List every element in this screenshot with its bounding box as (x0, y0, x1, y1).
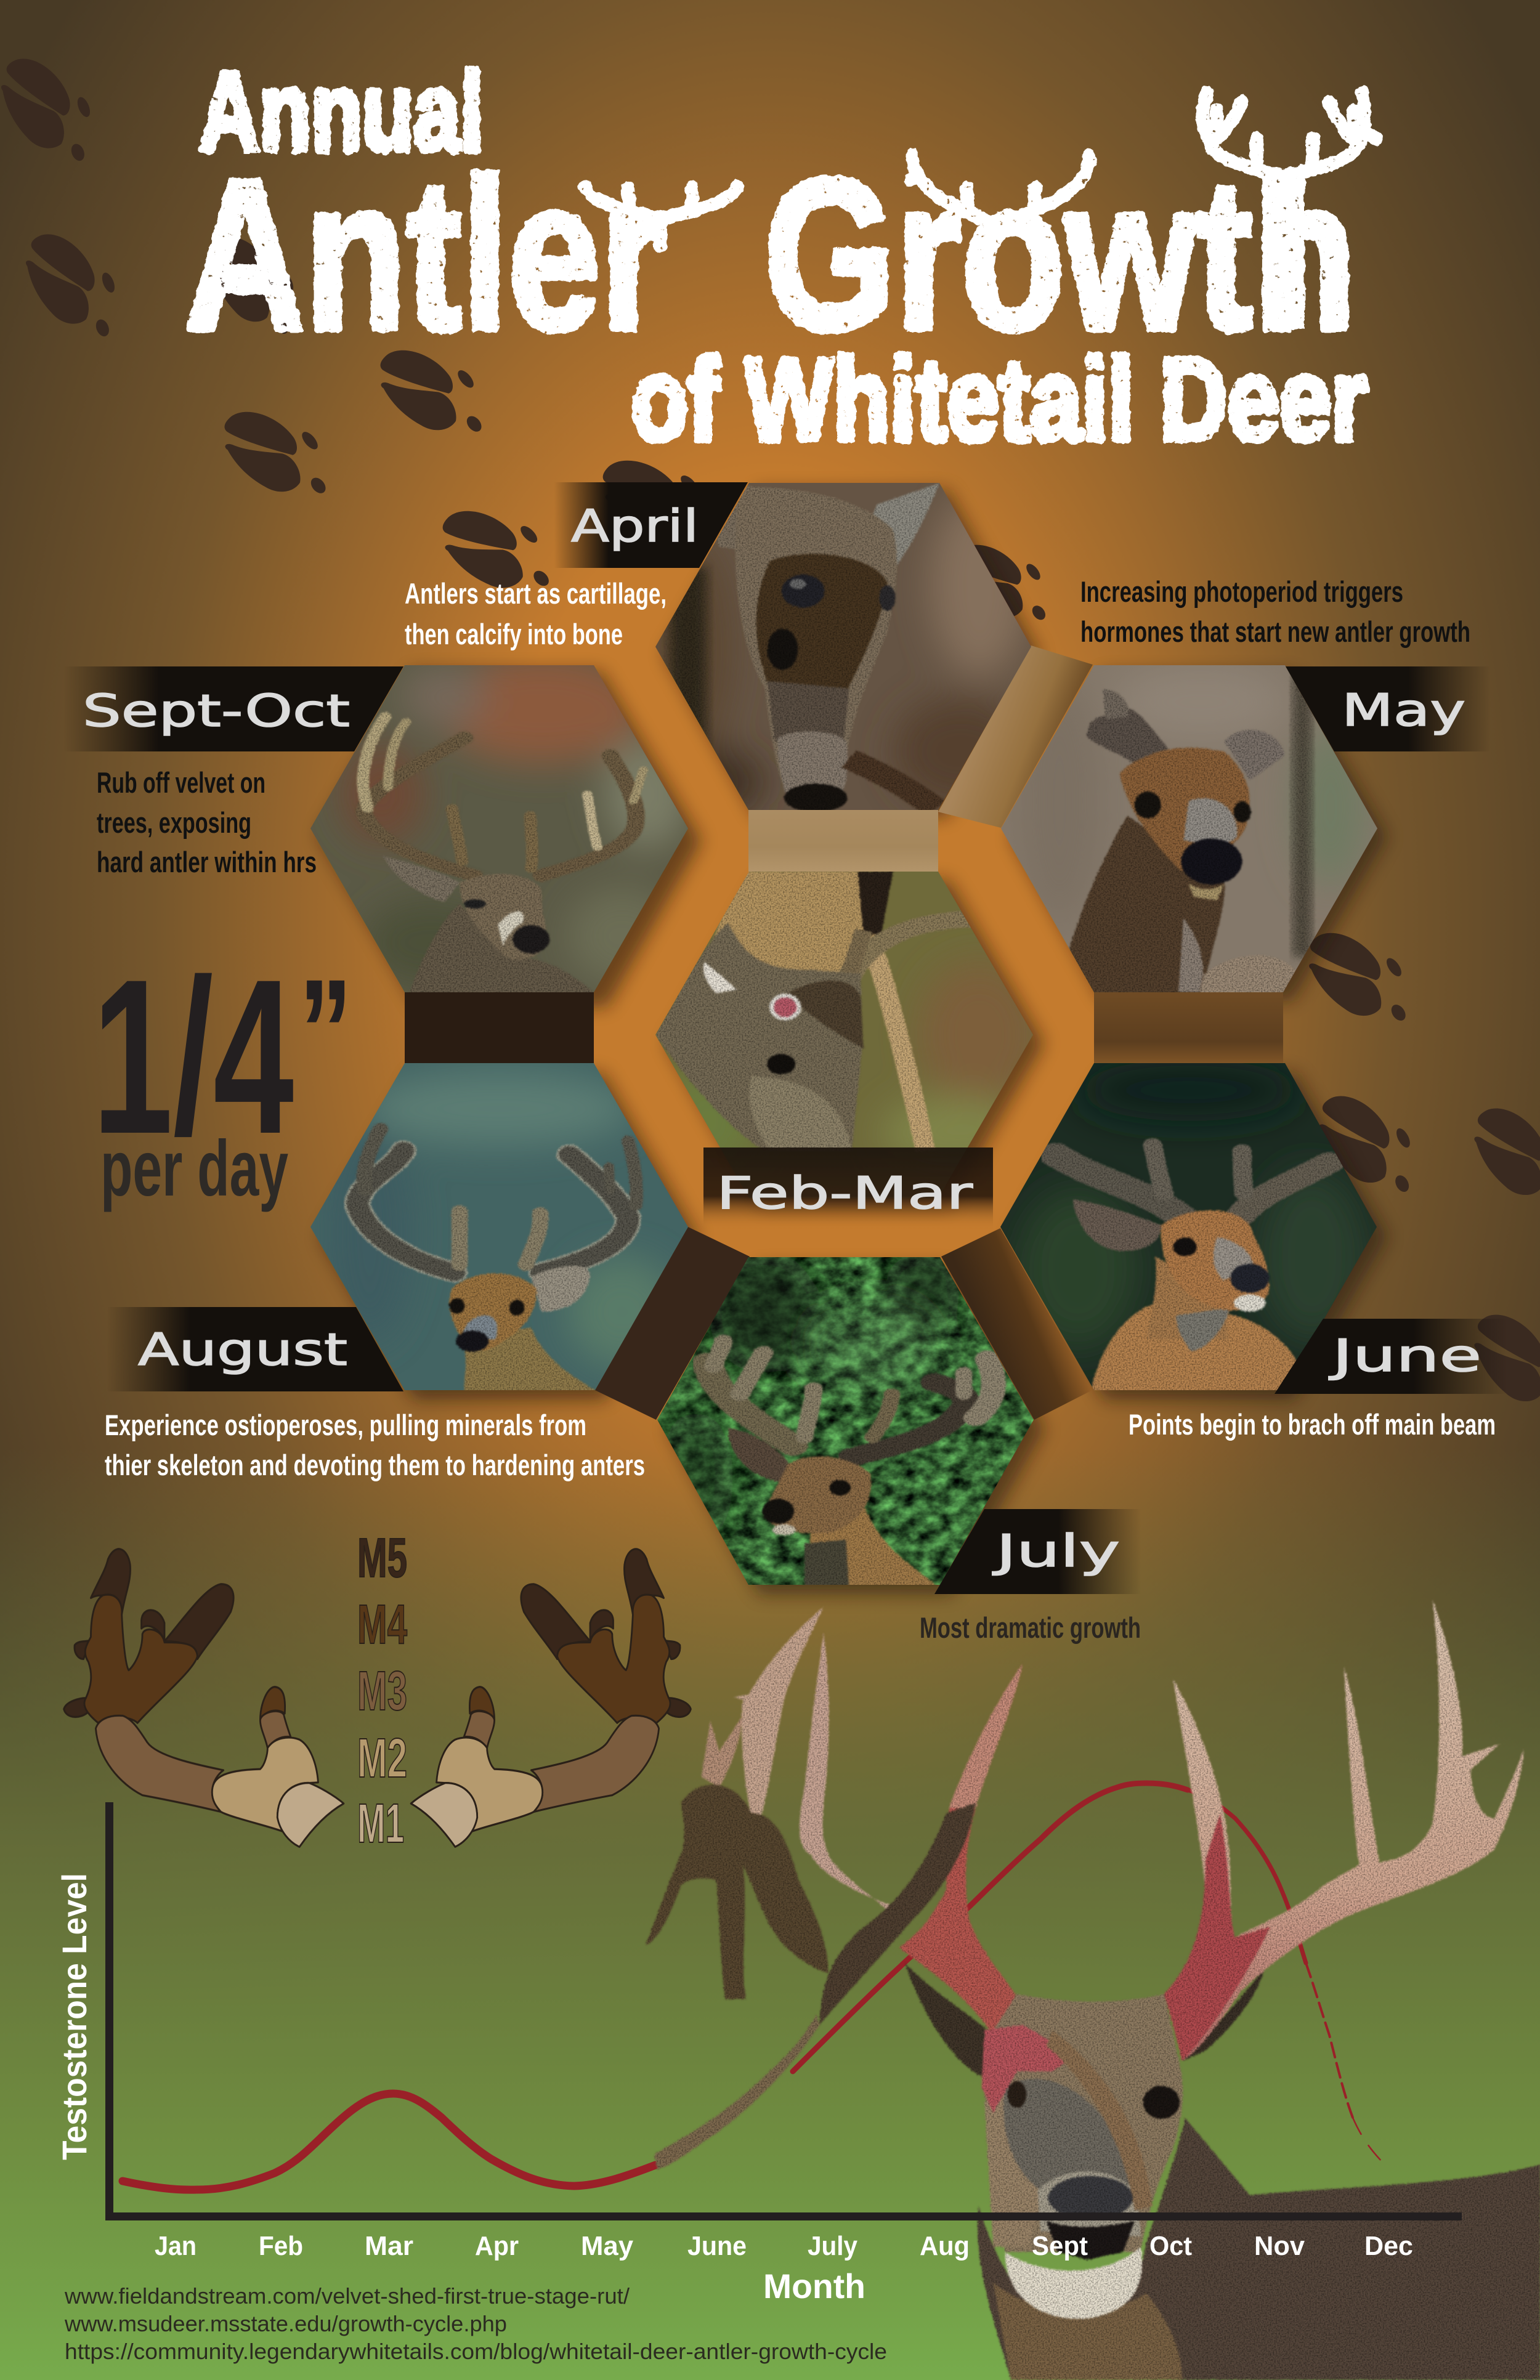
month axis labels: Dec (1364, 2231, 1413, 2261)
label: April: April (571, 500, 699, 552)
label: Feb-Mar (703, 1148, 993, 1229)
label: May: May (1342, 684, 1465, 736)
antler segment diagram (64, 1528, 691, 1855)
segment labels M5 to M1: M2 (357, 1728, 407, 1789)
title word: Growth: Growth (764, 134, 1356, 375)
month axis labels: July (808, 2231, 857, 2261)
title word: Antler: Antler (185, 134, 665, 375)
segment labels M5 to M1: M4 (357, 1594, 407, 1656)
hexagon drop shadows (318, 490, 1388, 1595)
text block: May note: Increasing photoperiod triggers (1080, 575, 1403, 608)
connector: April to May (938, 646, 1093, 828)
left antler (800, 1633, 905, 1927)
callout: 1/4 inch per day: ” (299, 949, 352, 1114)
photo: June buck (998, 1059, 1380, 1395)
text block: August note: thier skeleton and devoting them to hardening anters (105, 1449, 645, 1481)
text block: April note: then calcify into bone (405, 618, 623, 650)
axis title: Month: Month (763, 2267, 865, 2305)
text block: April note (405, 577, 667, 650)
title line: of Whitetail Deer: of Whitetail Deer (631, 334, 1368, 465)
right antler segments (411, 1549, 691, 1847)
chart axes (105, 1802, 1462, 2220)
deer footprints trail (0, 41, 1540, 1433)
text block: August note: Experience ostioperoses, pulling minerals from (105, 1409, 586, 1441)
title (185, 49, 1376, 465)
connector: July to June (941, 1228, 1092, 1420)
label: Sept-Oct (64, 666, 403, 751)
sources (64, 2283, 887, 2364)
month axis labels: Mar (365, 2231, 413, 2261)
hanging velvet (646, 1785, 829, 1999)
segment labels M5 to M1: M3 (357, 1661, 407, 1722)
connector: May to June (1094, 992, 1283, 1063)
month axis labels: Nov (1254, 2231, 1305, 2261)
axis title: Testosterone Level: Testosterone Level (55, 1873, 94, 2160)
callout: 1/4 inch per day: 1/4 (92, 933, 294, 1180)
label: July: July (992, 1525, 1120, 1577)
label: August (107, 1307, 403, 1391)
label: Sept-Oct: Sept-Oct (83, 685, 350, 737)
segment labels M5 to M1 (357, 1528, 407, 1855)
month axis labels: May (581, 2231, 634, 2261)
month axis labels: June (687, 2231, 747, 2261)
connector: August to July (595, 1227, 750, 1420)
sources: https://community.legendarywhitetails.com/blog/whitetail-deer-antler-growth-cycle (65, 2339, 887, 2364)
right antler (1164, 1599, 1524, 2061)
month axis labels: Feb (259, 2231, 303, 2261)
month axis labels: Aug (920, 2231, 970, 2261)
label: May (1286, 666, 1490, 751)
photo: buck shedding velvet (646, 1599, 1540, 2380)
month axis labels (155, 2231, 1413, 2261)
left antler segments (64, 1549, 344, 1847)
photo: August buck (308, 1059, 690, 1395)
icon: antlers on title letters (585, 92, 1376, 246)
label: June: June (1329, 1330, 1481, 1382)
month axis labels: Sept (1032, 2231, 1088, 2261)
sources: www.fieldandstream.com/velvet-shed-first-true-stage-rut/ (64, 2283, 630, 2309)
deer body and neck (978, 2118, 1540, 2380)
month axis labels: Apr (475, 2231, 519, 2261)
label: July (934, 1509, 1141, 1594)
head (983, 1994, 1183, 2252)
text block: May note (1080, 575, 1470, 648)
title line: Annual: Annual (199, 49, 484, 174)
text block: August note (105, 1409, 645, 1481)
connector: April to Feb-Mar (748, 810, 938, 872)
label: April (554, 482, 748, 568)
label: June (1275, 1319, 1506, 1394)
label: August: August (138, 1324, 347, 1375)
ears (905, 1963, 993, 2076)
photo: July buck (653, 1250, 1038, 1589)
photo: May buck (998, 662, 1380, 996)
connector: Sept-Oct to August (405, 992, 594, 1063)
panel: central orange ring (594, 483, 1094, 1257)
segment labels M5 to M1: M5 (357, 1528, 407, 1589)
photo: Sept-Oct buck (308, 653, 690, 996)
segment labels M5 to M1: M1 (357, 1793, 404, 1855)
text block: July note: Most dramatic growth (920, 1611, 1141, 1644)
text block: Sept-Oct note (97, 766, 317, 878)
h stem under antler (1266, 176, 1305, 330)
photo: Feb-Mar buck shedding antler (653, 868, 1041, 1201)
text block: Sept-Oct note: trees, exposing (97, 806, 251, 839)
sources: www.msudeer.msstate.edu/growth-cycle.php (64, 2311, 507, 2336)
text block: Sept-Oct note: Rub off velvet on (97, 766, 265, 799)
line chart curve: testosterone level (123, 1783, 1382, 2190)
callout: 1/4 inch per day: per day (100, 1125, 288, 1213)
month axis labels: Jan (155, 2231, 197, 2261)
photo: April buck (655, 483, 1031, 810)
text block: April note: Antlers start as cartillage, (405, 577, 667, 610)
label: Feb-Mar: Feb-Mar (716, 1167, 973, 1219)
month axis labels: Oct (1149, 2231, 1192, 2261)
text block: Sept-Oct note: hard antler within hrs (97, 846, 317, 878)
